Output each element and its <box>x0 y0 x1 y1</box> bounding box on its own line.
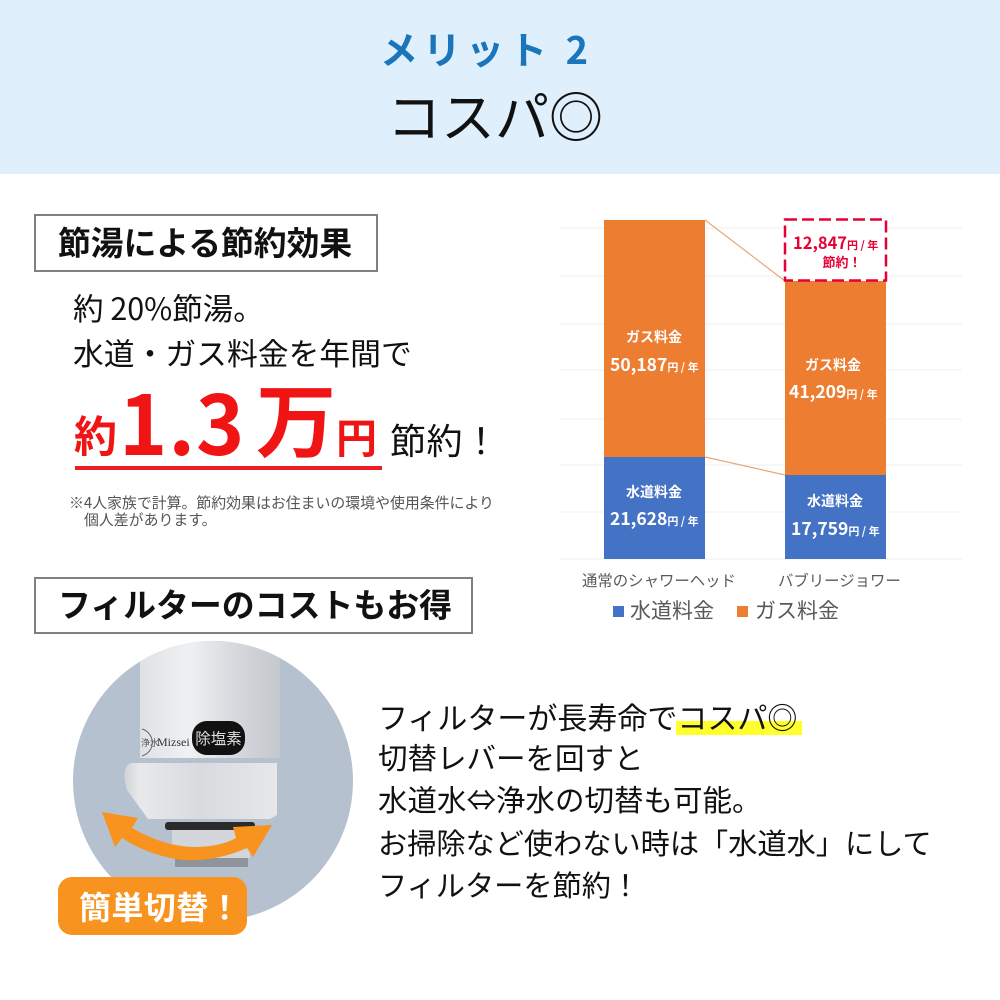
text block: filter benefits: 水道水⇔浄水の切替も可能。 <box>378 778 762 820</box>
text block: filter benefits: フィルターが長寿命でコスパ◎ <box>378 694 797 738</box>
text block: filter benefits: 切替レバーを回すと <box>378 736 644 778</box>
callout: about 13,000 yen saved: 1.3 <box>119 360 245 479</box>
text block: filter benefits <box>378 694 932 905</box>
product illustration: shower head with rotation arrow: 浄水 <box>141 736 159 749</box>
legend: ガス料金 <box>755 595 839 625</box>
bar: bubbly shower gas: 41,209円 / 年 <box>789 379 878 404</box>
bar: standard shower gas <box>604 220 705 457</box>
text block: savings description: 水道・ガス料金を年間で <box>73 329 412 374</box>
callout: 12,847 yen saved <box>785 220 886 280</box>
arrow: rotation <box>102 812 272 860</box>
axis labels: 通常のシャワーヘッド <box>582 569 736 591</box>
legend <box>613 595 839 625</box>
text block: savings description: 約 20%節湯。 <box>73 285 264 329</box>
text block: filter benefits: お掃除など使わない時は「水道水」にして <box>378 821 932 863</box>
heading: water saving effect: 節湯による節約効果 <box>58 225 352 262</box>
bar: bubbly shower gas: ガス料金 <box>805 355 861 375</box>
callout: about 13,000 yen saved: 約 <box>74 414 117 462</box>
bar: standard shower water: 21,628円 / 年 <box>610 506 699 531</box>
bar: standard shower water <box>604 457 705 559</box>
callout: 12,847 yen saved: 12,847円 / 年 <box>793 230 878 254</box>
callout: about 13,000 yen saved: 節約！ <box>390 421 500 462</box>
axis labels <box>582 569 901 591</box>
product illustration: shower head with rotation arrow: 除塩素 <box>195 727 242 749</box>
title: コスパ◎ <box>387 89 603 149</box>
footnote: 個人差があります。 <box>84 513 217 529</box>
bar: bubbly shower water <box>785 475 886 559</box>
bar: standard shower gas: ガス料金 <box>626 327 682 347</box>
bar: bubbly shower water: 17,759円 / 年 <box>791 516 880 541</box>
bar: bubbly shower gas <box>785 281 886 475</box>
bar: standard shower water: 水道料金 <box>626 482 682 502</box>
badge: easy switching <box>58 877 247 935</box>
bar: standard shower gas: 50,187円 / 年 <box>610 352 699 377</box>
product illustration: shower head with rotation arrow <box>73 641 353 917</box>
heading: water saving effect <box>34 214 378 272</box>
legend: 水道料金 <box>630 595 714 625</box>
header label: メリット 2 <box>380 20 593 75</box>
callout: about 13,000 yen saved: 万 <box>256 379 336 468</box>
callout: 12,847 yen saved: 節約！ <box>822 252 862 271</box>
product illustration: shower head with rotation arrow: Mizsei <box>157 735 190 749</box>
axis labels: バブリージョワー <box>778 569 901 591</box>
text block: filter benefits: フィルターを節約！ <box>378 863 640 905</box>
footnote <box>69 492 494 529</box>
badge: easy switching: 簡単切替！ <box>79 890 241 926</box>
highlight <box>676 721 802 735</box>
heading: filter cost: フィルターのコストもお得 <box>58 587 452 624</box>
callout: about 13,000 yen saved: 円 <box>336 416 377 462</box>
footnote: ※4人家族で計算。節約効果はお住まいの環境や使用条件により <box>69 492 494 513</box>
heading: filter cost <box>34 577 473 634</box>
callout: about 13,000 yen saved <box>74 360 500 479</box>
bar: bubbly shower water: 水道料金 <box>807 491 863 511</box>
header band <box>0 0 1000 174</box>
text block: savings description <box>73 285 412 374</box>
